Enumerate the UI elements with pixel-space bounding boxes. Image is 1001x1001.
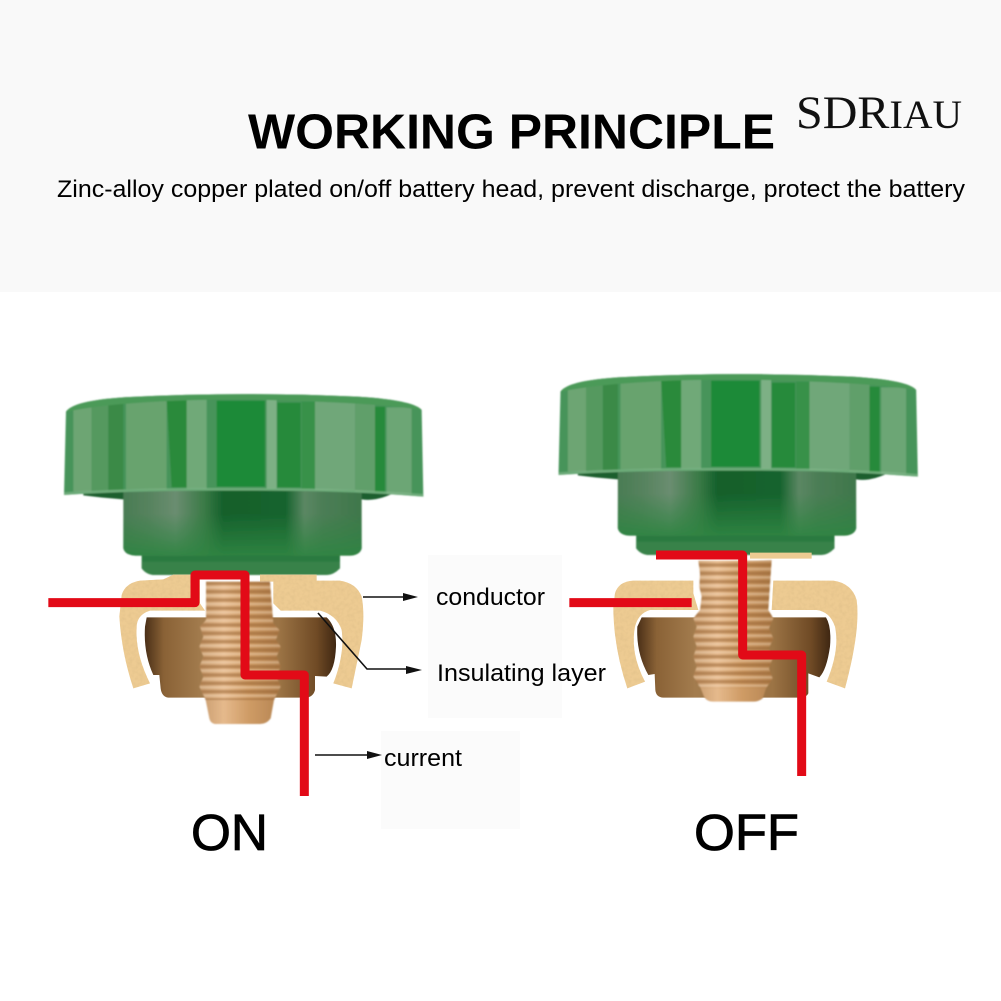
diagram: OFF state terminal [558, 374, 918, 776]
terminal body, ON [119, 575, 363, 724]
diagram: ON state terminal [48, 394, 423, 796]
label: current: current [384, 745, 462, 772]
state label: OFF: OFF [694, 804, 799, 861]
brand logo: SDRIAU: SDRIAU [796, 87, 962, 139]
current path, ON: closed circuit [48, 575, 304, 796]
terminal body, OFF [613, 553, 857, 702]
icon: green knob, ON [64, 394, 423, 575]
arrow: to current label [315, 751, 382, 759]
current path, OFF: open circuit [569, 555, 802, 776]
header band [0, 0, 1001, 292]
icon: green knob, OFF [558, 374, 918, 555]
label backdrop: current [381, 731, 520, 829]
arrow: to conductor label [363, 593, 418, 601]
label backdrop: conductor and insulating layer [428, 555, 562, 718]
label: conductor: conductor [436, 584, 545, 611]
title: WORKING PRINCIPLE [248, 104, 775, 160]
subtitle: Zinc-alloy copper plated on/off battery head, prevent discharge, protect the battery [57, 176, 965, 203]
state label: ON: ON [191, 804, 268, 861]
label: insulating layer: Insulating layer [437, 660, 606, 687]
arrow: to insulating layer label [318, 613, 422, 674]
